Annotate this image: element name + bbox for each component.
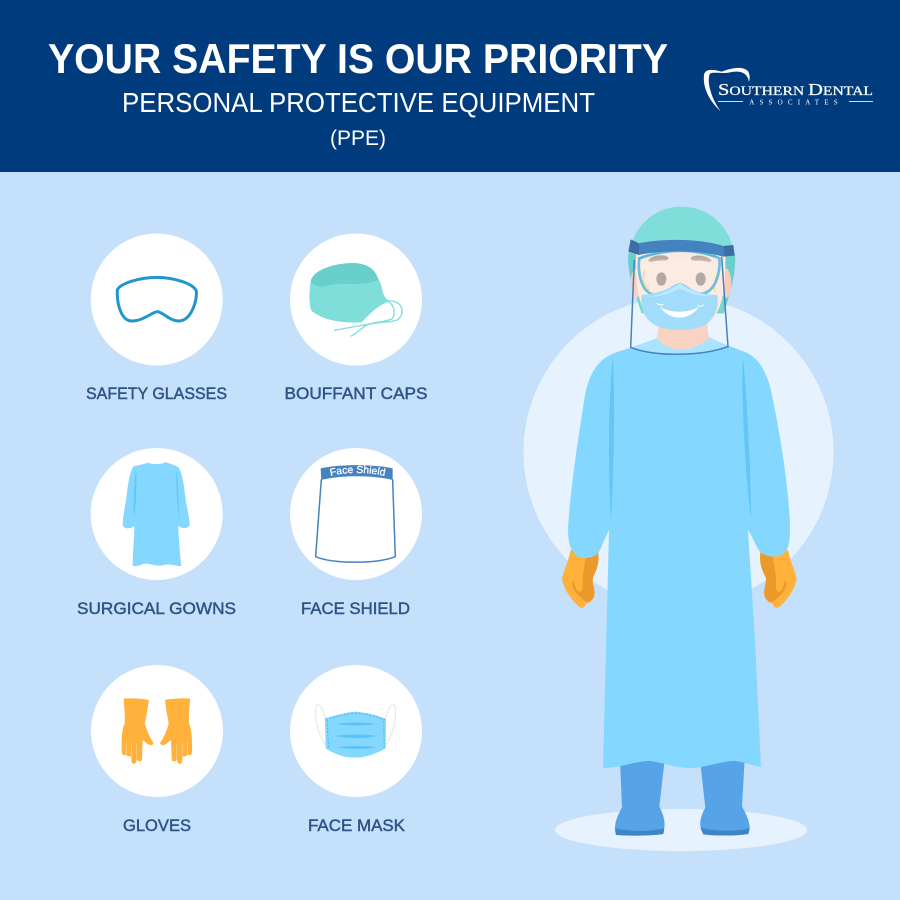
gloves on hands: [562, 550, 797, 608]
subtitle: PERSONAL PROTECTIVE EQUIPMENT: [122, 87, 595, 118]
boots: [615, 760, 750, 836]
label: GLOVES: [123, 816, 191, 835]
smile: [660, 305, 700, 318]
goggles: [643, 270, 719, 292]
logo: Southern Dental Associates: ASSOCIATES: [749, 98, 843, 106]
ground shadow: [555, 809, 807, 851]
panel: safety glasses: [86, 234, 227, 403]
eyes: [656, 272, 666, 286]
title: YOUR SAFETY IS OUR PRIORITY: [48, 35, 668, 82]
face: [636, 250, 725, 327]
icon: face mask: [315, 704, 396, 758]
label: SAFETY GLASSES: [86, 384, 227, 403]
header banner: [0, 0, 900, 172]
background circle: [524, 297, 834, 607]
label: SURGICAL GOWNS: [77, 599, 236, 618]
bouffant cap: [628, 207, 735, 313]
label: FACE MASK: [308, 816, 406, 835]
ears: [631, 269, 641, 298]
gown sleeve folds: [609, 356, 751, 520]
icon: face shield: [314, 465, 396, 563]
panel: gloves: [91, 665, 223, 835]
gown: [568, 345, 790, 768]
head with cap, shield and mask: [628, 207, 735, 355]
face mask: [641, 283, 718, 330]
shield band: [638, 240, 723, 257]
icon: surgical gown: [123, 462, 190, 566]
icon: safety glasses: [117, 277, 196, 321]
panel: bouffant caps: [284, 234, 428, 403]
eyebrows: [648, 255, 712, 262]
icon: face shield: Face Shield: [330, 466, 386, 476]
subtitle abbreviation: (PPE): [330, 127, 386, 150]
logo: Southern Dental Associates: SOUTHERN DENTAL: [718, 80, 873, 99]
icon: gloves: [122, 698, 192, 764]
logo: Southern Dental Associates: [704, 68, 873, 111]
figure: person wearing full PPE: [524, 207, 834, 851]
panel: face shield: [290, 448, 422, 618]
panel: surgical gowns: [77, 448, 236, 618]
label: BOUFFANT CAPS: [284, 384, 428, 403]
collar: [633, 338, 727, 355]
panel: face mask: [290, 665, 422, 835]
label: FACE SHIELD: [301, 599, 410, 618]
clear shield: [631, 257, 728, 354]
neck: [656, 323, 711, 351]
icon: bouffant cap: [309, 263, 402, 336]
